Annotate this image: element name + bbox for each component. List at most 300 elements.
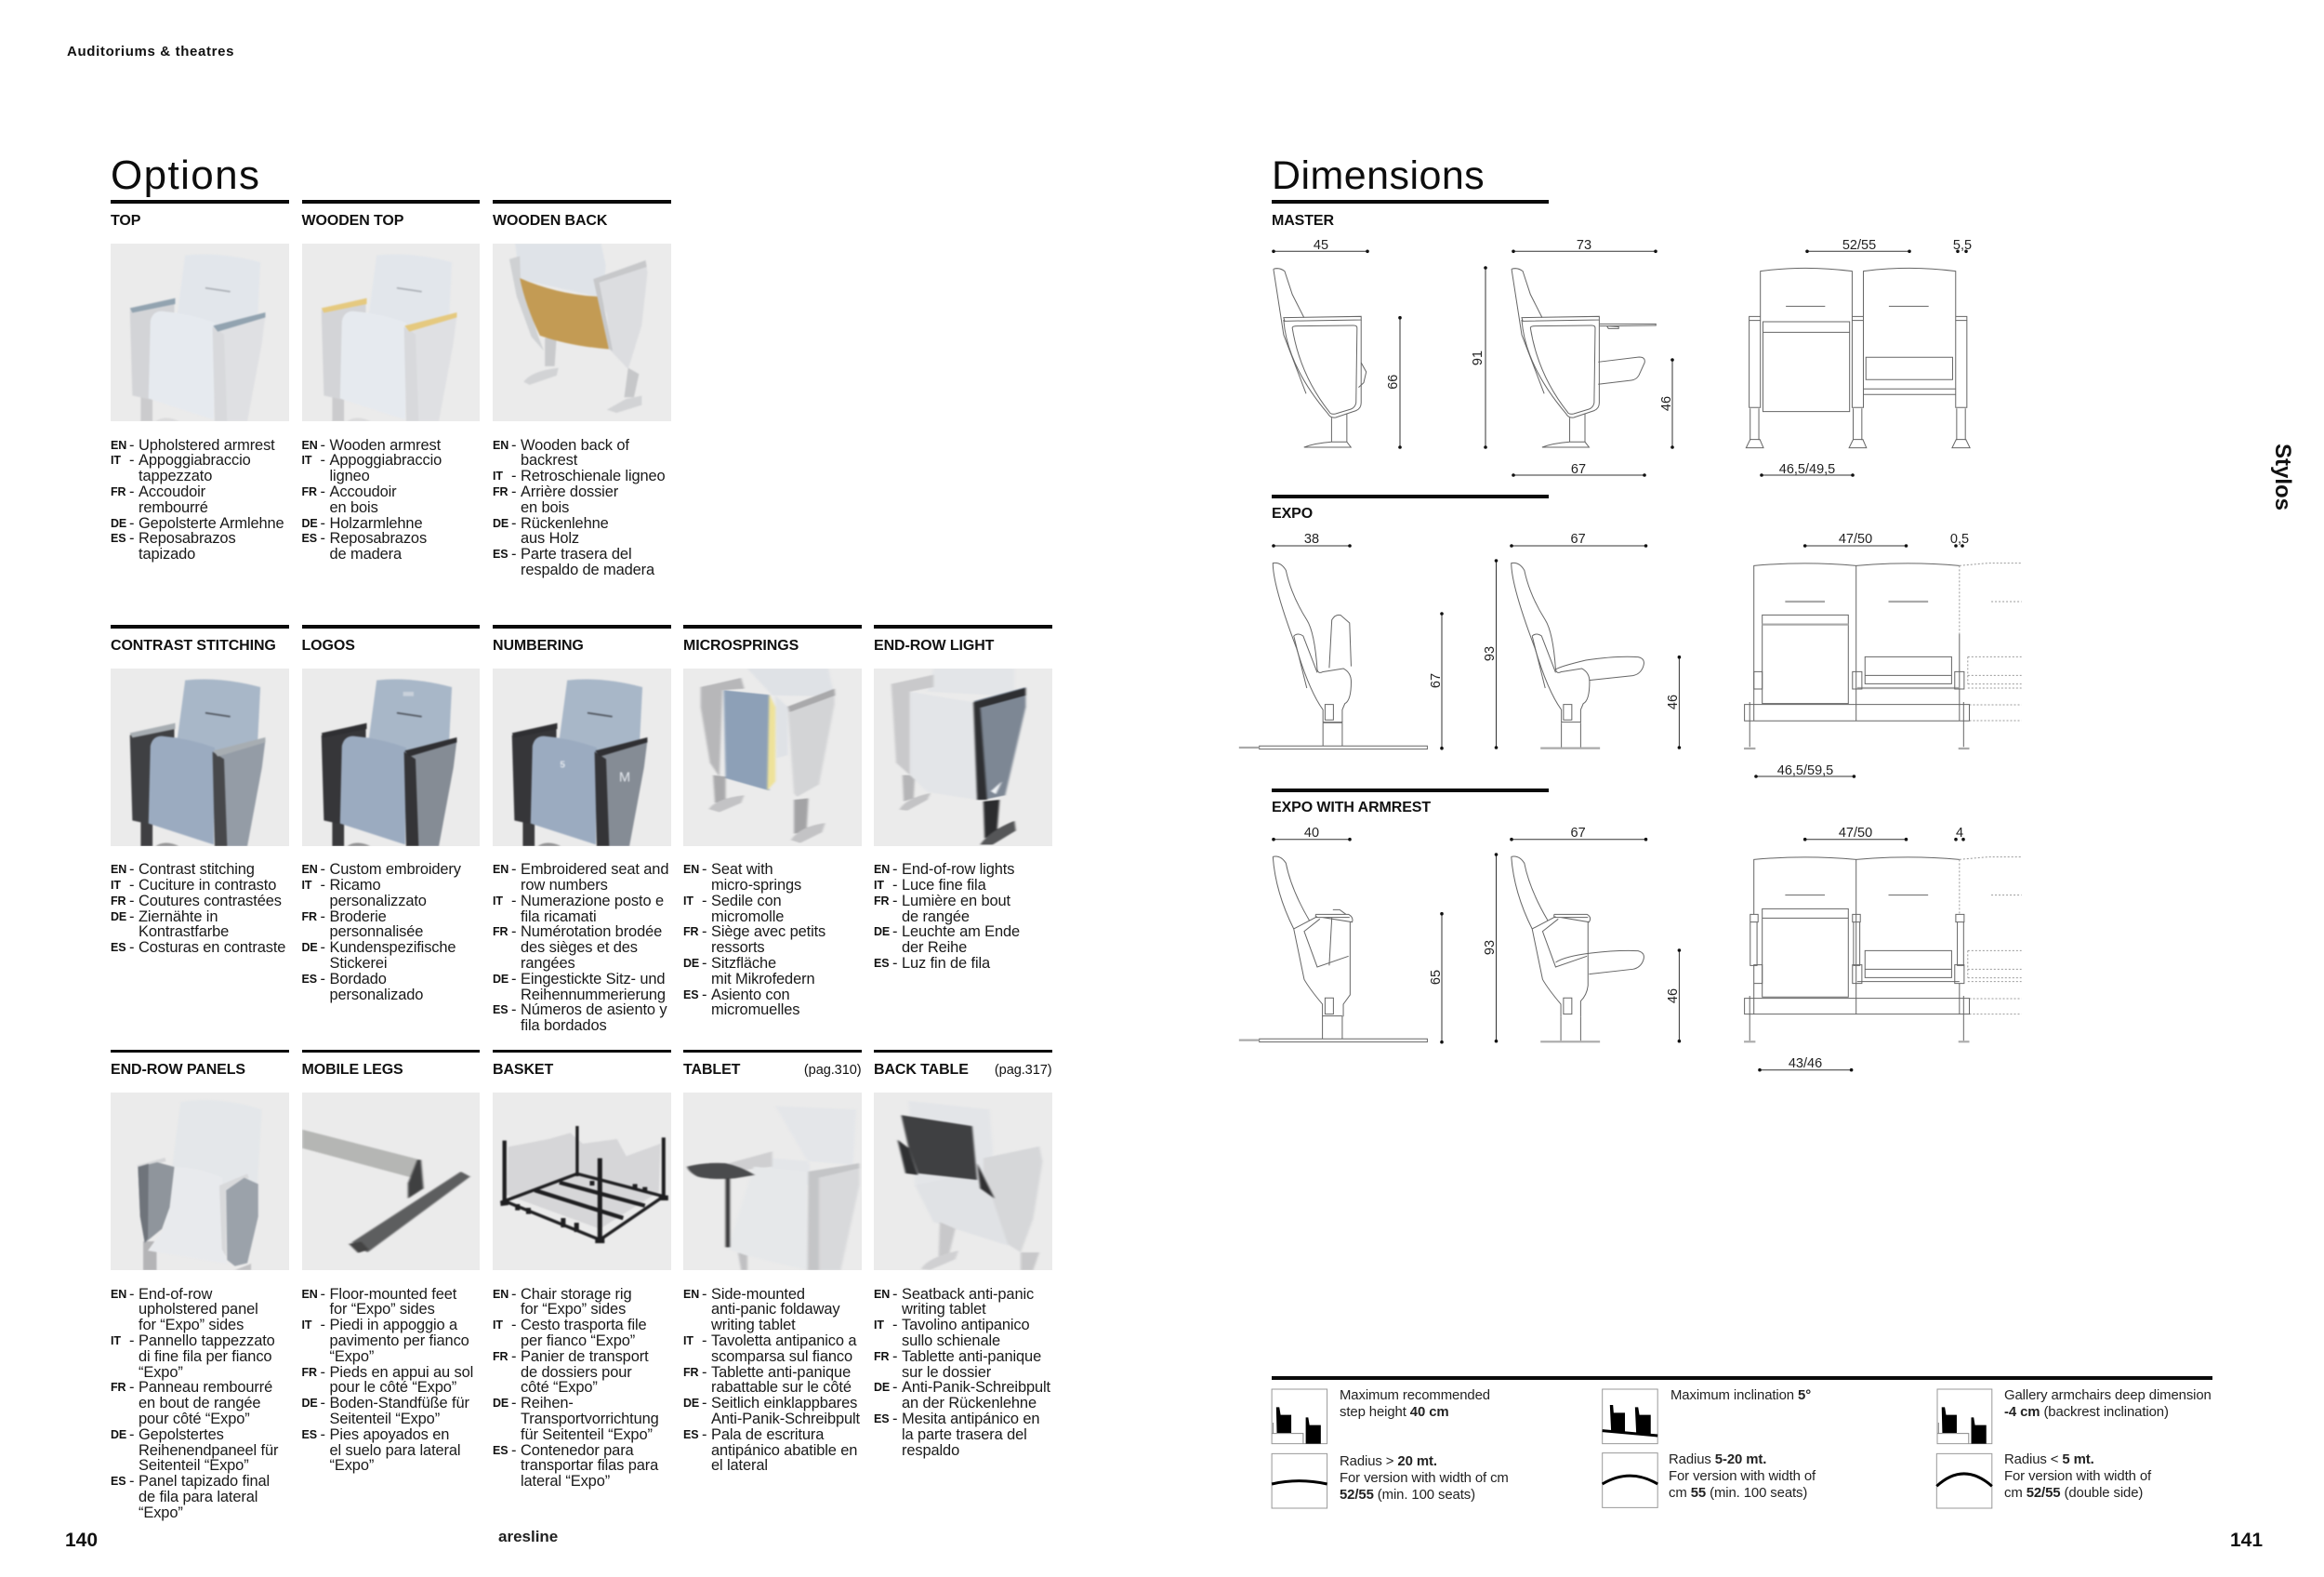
text: Back table descriptions: Anti-Panik-Schreibpult [902,1379,1050,1396]
text: Back table descriptions: - [892,1317,897,1333]
text: Top descriptions: rembourré [139,499,208,516]
text: End-row light descriptions: FR [874,895,889,908]
photo: chair with back table [874,1093,1052,1270]
text: Basket descriptions: IT [493,1319,503,1332]
text: Contrast stitching descriptions: - [129,893,134,909]
text: Contrast stitching descriptions: - [129,877,134,894]
panel: Microsprings option [683,625,862,1018]
text: Numbering descriptions: des sièges et des [521,939,638,956]
text: Wooden back descriptions [493,437,666,578]
dimensions: Master: 5,5 [1953,238,1972,253]
text: End-row panels descriptions: - [129,1426,134,1443]
text: Numbering descriptions: - [511,893,516,909]
text: Tablet descriptions: IT [683,1334,693,1347]
text: End-row panels descriptions: DE [111,1428,126,1441]
text: Wooden top descriptions: - [320,515,325,532]
text: Back table descriptions: EN [874,1288,890,1301]
text: Mobile legs descriptions: Pies apoyados en [329,1426,449,1443]
text: End-row panels descriptions: “Expo” [139,1364,183,1381]
text: Logos descriptions: - [320,939,325,956]
text: Tablet descriptions: Pala de escritura [711,1426,824,1443]
text: Basket descriptions: transportar filas para [521,1457,658,1474]
dimensions: Master: 46,5/49,5 [1779,462,1835,477]
text: Microsprings descriptions: DE [683,957,699,970]
text: Numbering descriptions: - [511,861,516,878]
heading block: Expo with armrest: EXPO WITH ARMREST [1272,800,1431,815]
text: End-row panels descriptions: Seitenteil “Expo” [139,1457,249,1474]
text: Basket descriptions: Chair storage rig [521,1286,631,1303]
text: End-row panels descriptions: upholstered panel [139,1301,258,1318]
text: Numbering descriptions: Eingestickte Sitz- und [521,971,665,987]
photo: chair with upholstered armrest [111,244,288,420]
text: Wooden top descriptions: ES [301,532,317,545]
text: Wooden top descriptions: ligneo [329,468,370,484]
panel: End-row panels option [111,1050,289,1521]
text: End-row panels descriptions: End-of-row [139,1286,212,1303]
text: Top descriptions: - [129,437,134,454]
text: End-row light descriptions: de rangée [902,908,970,925]
text: Microsprings descriptions: Siège avec petits [711,923,825,940]
text: Microsprings descriptions: Asiento con [711,987,790,1003]
text: Tablet descriptions: - [702,1364,706,1381]
photo: chair with end-row light [874,668,1052,846]
text: Basket descriptions: - [511,1395,516,1411]
text: Contrast stitching descriptions: Kontrastfarbe [139,923,229,940]
text: Logos descriptions: - [320,877,325,894]
heading: Wooden top: WOODEN TOP [301,212,403,229]
text: Wooden top descriptions: Wooden armrest [329,437,441,454]
panel: Logos option [301,625,480,1003]
note: step height: Maximum recommended [1340,1388,1490,1403]
icon: step height [1272,1389,1327,1444]
text: Wooden top descriptions: Reposabrazos [329,530,427,547]
text: Logos descriptions: ES [301,973,317,986]
text: Top descriptions [111,437,284,563]
text: Logos descriptions: Bordado [329,971,387,987]
text: End-row panels descriptions: - [129,1473,134,1490]
heading block: Expo with armrest [1272,788,1549,815]
text: End-row light descriptions: End-of-row lights [902,861,1014,878]
note: radius 5-20 mt: cm 55 (min. 100 seats) [1669,1486,1807,1501]
text: Contrast stitching descriptions: - [129,939,134,956]
drawing: Master front view [1746,268,1970,448]
text: Contrast stitching descriptions: DE [111,910,126,923]
text: Basket descriptions [493,1286,659,1490]
text: Contrast stitching descriptions: FR [111,895,125,908]
text: End-row panels descriptions: “Expo” [139,1504,183,1521]
text: Logos descriptions: DE [301,941,318,954]
text: End-row light descriptions: Leuchte am Ende [902,923,1020,940]
photo: chair with wooden back [493,244,671,420]
text: Microsprings descriptions: mit Mikrofedern [711,971,814,987]
heading block: Master [1272,200,1549,229]
dimensions: Master: 91 [1471,351,1486,365]
text: Wooden back descriptions: ES [493,548,508,561]
text: Mobile legs descriptions: DE [301,1397,318,1410]
text: End-row panels descriptions: Pannello tappezzato [139,1332,275,1349]
panel: Basket option [493,1050,671,1490]
text: Basket descriptions: Panier de transport [521,1348,649,1365]
text: Tablet descriptions: rabattable sur le côté [711,1379,852,1396]
text: End-row panels descriptions: en bout de rangée [139,1395,260,1411]
text: Wooden top descriptions: de madera [329,546,402,563]
text: Top descriptions: EN [111,439,126,452]
text: Microsprings descriptions: ES [683,988,698,1001]
text: Contrast stitching descriptions: IT [111,879,121,892]
text: Contrast stitching descriptions: Cuciture in contrasto [139,877,276,894]
text: Contrast stitching descriptions: - [129,861,134,878]
title: Options: Options [111,152,260,198]
text: Back table descriptions: Tavolino antipanico [902,1317,1030,1333]
text: End-row panels descriptions: pour côté “Expo” [139,1411,250,1427]
text: Mobile legs descriptions: - [320,1286,325,1303]
text: Numbering descriptions: fila ricamati [521,908,597,925]
heading block: Master: MASTER [1272,212,1334,229]
panel: Back table option [874,1050,1052,1459]
text: Microsprings descriptions: - [702,923,706,940]
text: Back table descriptions: - [892,1348,897,1365]
text: Wooden back descriptions: Arrière dossier [521,484,618,500]
heading: End-row panels: END-ROW PANELS [111,1062,245,1078]
heading: Back table with page reference: BACK TABLE [874,1062,969,1078]
heading: Tablet with page reference: (pag.310) [804,1063,861,1078]
panel: End-row light option [874,625,1052,972]
panel: Top option [111,200,289,563]
text: Numbering descriptions: Numérotation brodée [521,923,662,940]
heading: Microsprings: MICROSPRINGS [683,638,799,653]
text: Tablet descriptions: - [702,1332,706,1349]
text: Back table descriptions: IT [874,1319,884,1332]
photo: chair storage basket [493,1093,671,1270]
text: Mobile legs descriptions: Pieds en appui au sol [329,1364,473,1381]
text: Numbering descriptions: - [511,1001,516,1018]
text: Wooden back descriptions: - [511,437,516,454]
text: Top descriptions: tappezzato [139,468,212,484]
text: Wooden top descriptions: - [320,484,325,500]
text: Basket descriptions: - [511,1442,516,1459]
note: gallery armchairs: Gallery armchairs deep dimension [2004,1388,2212,1403]
drawing: Expo with armrest front view [1744,857,2022,1041]
text: Back table descriptions: Tablette anti-panique [902,1348,1041,1365]
drawing: Expo front view [1744,563,2022,749]
text: Back table descriptions [874,1286,1050,1459]
text: Tablet descriptions: Tavoletta antipanico a [711,1332,856,1349]
heading block: Expo: EXPO [1272,506,1313,522]
icon: radius under 5 [1936,1453,1992,1508]
text: Logos descriptions: Stickerei [329,955,387,972]
note: step height [1340,1388,1490,1420]
text: Microsprings descriptions: - [702,893,706,909]
text: Top descriptions: - [129,484,134,500]
text: Top descriptions: - [129,530,134,547]
text: Tablet descriptions: el lateral [711,1457,768,1474]
panel: Contrast stitching option [111,625,289,956]
note: radius under 5 mt: cm 52/55 (double side) [2004,1486,2143,1501]
text: Back table descriptions: an der Rückenlehne [902,1395,1037,1411]
text: Contrast stitching descriptions: EN [111,863,126,876]
text: Numbering descriptions: rangées [521,955,575,972]
text: Mobile legs descriptions: Seitenteil “Expo” [329,1411,440,1427]
text: Basket descriptions: - [511,1348,516,1365]
photo: chair with side tablet [683,1093,861,1270]
text: End-row panels descriptions [111,1286,279,1521]
heading: Top: TOP [111,212,140,229]
dimensions: Expo: 93 [1483,646,1498,661]
text: Tablet descriptions [683,1286,860,1474]
text: Numbering descriptions: Embroidered seat and [521,861,668,878]
text: End-row light descriptions: - [892,923,897,940]
text: Wooden top descriptions: Appoggiabraccio [329,452,442,469]
text: Top descriptions: - [129,452,134,469]
dimensions: Expo: 38 [1304,532,1319,547]
text: Back table descriptions: writing tablet [902,1301,986,1318]
text: Logos descriptions: Kundenspezifische [329,939,456,956]
drawing: Expo side views [1239,563,1644,749]
text: End-row light descriptions: der Reihe [902,939,967,956]
text: Logos descriptions: Custom embroidery [329,861,461,878]
text: Top descriptions: DE [111,517,126,530]
text: Wooden top descriptions: - [320,452,325,469]
text: Mobile legs descriptions: el suelo para lateral [329,1442,460,1459]
text: Logos descriptions [301,861,461,1003]
text: Tablet descriptions: anti-panic foldaway [711,1301,839,1318]
text: End-row light descriptions: Lumière en bout [902,893,1010,909]
text: Basket descriptions: côté “Expo” [521,1379,598,1396]
text: Tablet descriptions: Seitlich einklappbares [711,1395,857,1411]
icon: radius 5-20 [1603,1453,1657,1507]
text: Contrast stitching descriptions: - [129,908,134,925]
photo: chair with embroidered logo [301,668,480,846]
text: Mobile legs descriptions: EN [301,1288,318,1301]
text: Basket descriptions: Cesto trasporta file [521,1317,647,1333]
text: Wooden back descriptions: Rückenlehne [521,515,609,532]
note: gallery armchairs: -4 cm (backrest inclination) [2004,1405,2169,1420]
text: Top descriptions: IT [111,454,121,467]
note: radius over 20 mt [1340,1454,1509,1503]
dimensions: Master: 66 [1386,375,1401,390]
text: Logos descriptions: personnalisée [329,923,423,940]
text: End-row panels descriptions: for “Expo” sides [139,1317,244,1333]
heading block: Expo [1272,495,1549,522]
text: Wooden top descriptions: EN [301,439,318,452]
divider rule above notes [1272,1376,2212,1380]
text: Logos descriptions: - [320,861,325,878]
text: End-row panels descriptions: FR [111,1381,125,1394]
text: Top descriptions: Reposabrazos [139,530,236,547]
note: step height: step height 40 cm [1340,1405,1449,1420]
icon: radius over 20 [1272,1453,1327,1508]
text: Basket descriptions: per fianco “Expo” [521,1332,635,1349]
text: Tablet descriptions: - [702,1286,706,1303]
heading: End-row light: END-ROW LIGHT [874,638,994,653]
text: Back table descriptions: - [892,1411,897,1427]
text: Wooden back descriptions: - [511,468,516,484]
text: Microsprings descriptions: IT [683,895,693,908]
text: Wooden top descriptions: Accoudoir [329,484,397,500]
dimensions: Expo with armrest: 67 [1571,826,1586,841]
text: Basket descriptions: FR [493,1350,508,1363]
text: Microsprings descriptions: Sedile con [711,893,782,909]
dimensions: Master: 45 [1314,238,1328,253]
text: Mobile legs descriptions: pour le côté “Expo” [329,1379,456,1396]
note: radius under 5 mt: Radius < 5 mt. [2004,1452,2094,1467]
text: Wooden top descriptions: en bois [329,499,378,516]
text: End-row panels descriptions: Panel tapizado final [139,1473,270,1490]
text: Numbering descriptions: row numbers [521,877,608,894]
text: Logos descriptions: - [320,971,325,987]
dimensions: Expo: 46,5/59,5 [1777,763,1833,778]
text: End-row light descriptions: - [892,861,897,878]
text: End-row panels descriptions: EN [111,1288,126,1301]
heading: Wooden back: WOODEN BACK [493,212,607,229]
brand logo text: aresline: aresline [498,1528,558,1545]
panel: Numbering option [493,625,671,1034]
text: Basket descriptions: Reihen- [521,1395,574,1411]
text: Mobile legs descriptions: - [320,1317,325,1333]
text: Tablet descriptions: antipánico abatible en [711,1442,857,1459]
drawing: Expo with armrest side views [1239,856,1644,1042]
text: Numbering descriptions: Numerazione posto e [521,893,664,909]
text: Wooden back descriptions: Wooden back of [521,437,629,454]
text: Contrast stitching descriptions: Ziernähte in [139,908,218,925]
text: Numbering descriptions: Reihennummerierung [521,987,666,1003]
text: Wooden back descriptions: IT [493,470,503,483]
text: Basket descriptions: für Seitenteil “Expo” [521,1426,653,1443]
note: radius 5-20 mt: For version with width of [1669,1469,1816,1484]
text: Numbering descriptions: - [511,923,516,940]
section label: Auditoriums & theatres: Auditoriums & theatres [67,43,234,60]
text: Contrast stitching descriptions: Costuras en contraste [139,939,285,956]
text: Basket descriptions: - [511,1286,516,1303]
text: Back table descriptions: Mesita antipánico en [902,1411,1039,1427]
text: Wooden back descriptions: - [511,546,516,563]
photo: chair with seat and row numbers: 5 [560,760,565,770]
text: Mobile legs descriptions: for “Expo” sides [329,1301,435,1318]
panel: Mobile legs option [301,1050,480,1474]
heading: Numbering: NUMBERING [493,638,584,653]
photo: chair with contrast stitching [111,668,288,846]
note: radius over 20 mt: Radius > 20 mt. [1340,1454,1437,1469]
icon: inclination [1603,1389,1657,1444]
text: Mobile legs descriptions: FR [301,1366,317,1379]
text: Top descriptions: Appoggiabraccio [139,452,251,469]
text: Wooden top descriptions: Holzarmlehne [329,515,422,532]
photo: chair with seat and row numbers [493,668,671,846]
text: Wooden top descriptions: - [320,437,325,454]
photo: chair with wooden armrest [301,244,480,420]
text: End-row panels descriptions: di fine fila per fianco [139,1348,271,1365]
text: Wooden back descriptions: backrest [521,452,577,469]
drawing: Master side views [1274,269,1656,447]
heading: Mobile legs: MOBILE LEGS [301,1062,403,1078]
heading: Contrast stitching: CONTRAST STITCHING [111,638,276,653]
heading: Basket: BASKET [493,1062,553,1078]
text: Microsprings descriptions [683,861,825,1018]
text: Top descriptions: ES [111,532,125,545]
text: End-row panels descriptions: Panneau rembourré [139,1379,272,1396]
dimensions: Expo with armrest: 46 [1666,988,1681,1003]
panel: Tablet option [683,1050,862,1474]
text: Tablet descriptions: scomparsa sul fianco [711,1348,852,1365]
text: Back table descriptions: ES [874,1412,889,1425]
text: Basket descriptions: Contenedor para [521,1442,634,1459]
dimensions: Expo: 67 [1429,673,1444,688]
text: Mobile legs descriptions: IT [301,1319,311,1332]
text: Mobile legs descriptions: pavimento per fianco [329,1332,469,1349]
text: Numbering descriptions [493,861,668,1034]
text: Contrast stitching descriptions: Contrast stitching [139,861,255,878]
text: Logos descriptions: IT [301,879,311,892]
text: Mobile legs descriptions [301,1286,473,1474]
text: Mobile legs descriptions: - [320,1395,325,1411]
icons: seating notes [1272,1389,1992,1508]
page number 140: 140 [65,1530,98,1551]
text: Basket descriptions: ES [493,1444,508,1457]
text: End-row light descriptions: Luz fin de fila [902,955,990,972]
text: Wooden top descriptions: IT [301,454,311,467]
text: Logos descriptions: Broderie [329,908,387,925]
text: Logos descriptions: Ricamo [329,877,381,894]
text: Microsprings descriptions: Seat with [711,861,773,878]
text: Contrast stitching descriptions: Coutures contrastées [139,893,282,909]
text: Top descriptions: Upholstered armrest [139,437,275,454]
text: Top descriptions: Accoudoir [139,484,205,500]
text: Tablet descriptions: DE [683,1397,699,1410]
text: Mobile legs descriptions: Piedi in appoggio a [329,1317,457,1333]
dimensions: Expo with armrest: 65 [1429,970,1444,985]
text: Mobile legs descriptions: Boden-Standfüße für [329,1395,469,1411]
dimensions: Expo with armrest: 93 [1483,940,1498,955]
text: Microsprings descriptions: - [702,955,706,972]
heading: Back table with page reference [874,1062,1052,1078]
text: Tablet descriptions: - [702,1395,706,1411]
heading: Tablet with page reference: TABLET [683,1062,740,1078]
dimensions: Expo with armrest: 40 [1304,826,1319,841]
text: Numbering descriptions: EN [493,863,508,876]
text: Basket descriptions: for “Expo” sides [521,1301,626,1318]
text: Basket descriptions: EN [493,1288,508,1301]
text: End-row light descriptions: - [892,955,897,972]
text: Wooden back descriptions: respaldo de madera [521,562,654,578]
text: Basket descriptions: de dossiers pour [521,1364,632,1381]
text: Wooden back descriptions: - [511,484,516,500]
note: radius 5-20 mt [1669,1452,1816,1501]
text: Numbering descriptions: Números de asiento y [521,1001,667,1018]
title: Dimensions: Dimensions [1272,153,1485,198]
text: Basket descriptions: - [511,1317,516,1333]
text: Wooden back descriptions: EN [493,439,508,452]
photo: mobile floor legs [301,1093,480,1270]
text: Top descriptions: - [129,515,134,532]
text: Numbering descriptions: DE [493,973,508,986]
note: radius under 5 mt [2004,1452,2151,1501]
text: Microsprings descriptions: EN [683,863,699,876]
dimensions: Master: 52/55 [1842,238,1876,253]
text: End-row light descriptions: - [892,877,897,894]
note: radius 5-20 mt: Radius 5-20 mt. [1669,1452,1766,1467]
text: Tablet descriptions: EN [683,1288,699,1301]
text: Microsprings descriptions: Sitzfläche [711,955,776,972]
photo: chair with end-row panels [111,1093,288,1270]
note: radius over 20 mt: 52/55 (min. 100 seats) [1340,1488,1475,1503]
text: Mobile legs descriptions: ES [301,1428,317,1441]
text: End-row light descriptions: DE [874,925,890,938]
text: Wooden top descriptions [301,437,442,563]
text: Mobile legs descriptions: Floor-mounted feet [329,1286,456,1303]
dimensions: Expo: 0,5 [1950,532,1969,547]
text: Back table descriptions: sullo schienale [902,1332,1000,1349]
text: Logos descriptions: personalizado [329,987,423,1003]
